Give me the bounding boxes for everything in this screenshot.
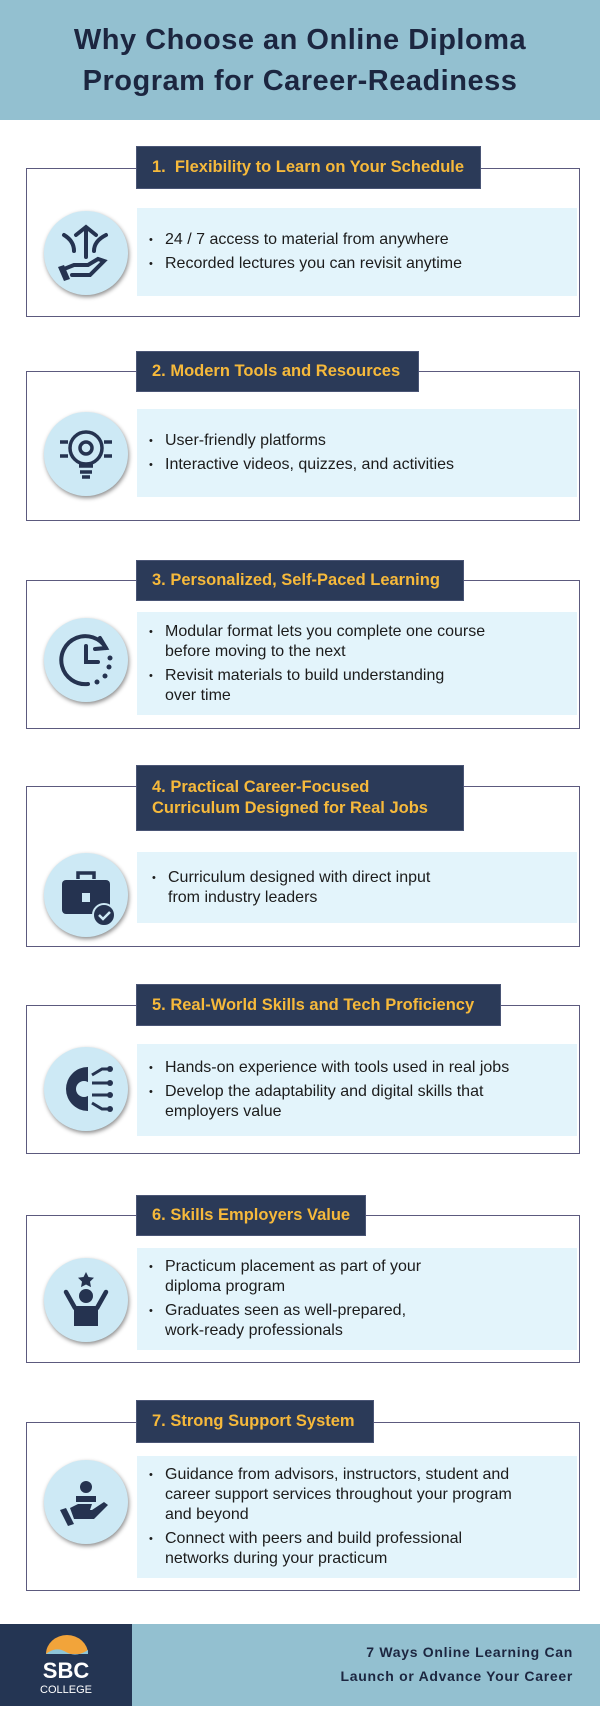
- panel 3 bullets: Modular format lets you complete one course: [165, 622, 485, 640]
- panel 7 bullets: [137, 1456, 577, 1578]
- panel 4 bullets: [137, 852, 577, 923]
- panel 5 bullets: [137, 1044, 577, 1136]
- panel 3 bullets: [137, 612, 577, 715]
- logo: SBC College: SBC: [43, 1658, 89, 1683]
- panel 4 bullets: Curriculum designed with direct input: [168, 868, 430, 886]
- panel 7 bullets: career support services throughout your program: [165, 1486, 512, 1503]
- panel 7 heading: [137, 1401, 373, 1442]
- icon: gear bulb: [44, 412, 128, 496]
- panel 6 heading: 6. Skills Employers Value: [152, 1206, 350, 1224]
- panel 1 heading: [137, 147, 480, 188]
- panel 7 bullets: and beyond: [165, 1506, 249, 1523]
- panel 6 bullets: Practicum placement as part of your: [165, 1258, 421, 1275]
- panel 6 bullets: diploma program: [165, 1278, 285, 1295]
- panel 5 bullets: employers value: [165, 1103, 282, 1120]
- panel 1 bullets: 24 / 7 access to material from anywhere: [165, 231, 449, 248]
- icon: hand with arrows: [44, 211, 128, 295]
- footer tagline: 7 Ways Online Learning Can: [366, 1644, 573, 1660]
- panel 5 heading: [137, 985, 500, 1025]
- panel 6 bullets: Graduates seen as well-prepared,: [165, 1302, 406, 1319]
- panel 1 heading: 1. Flexibility to Learn on Your Schedule: [152, 158, 464, 176]
- panel 2 bullets: Interactive videos, quizzes, and activities: [165, 456, 454, 473]
- panel 2 frame: [26, 371, 580, 521]
- footer tagline: [341, 1644, 573, 1684]
- panel 1 frame: [26, 168, 580, 317]
- panel 2 bullets: [137, 409, 577, 497]
- footer tagline: Launch or Advance Your Career: [341, 1668, 573, 1684]
- panel 1 bullets: [137, 208, 577, 296]
- panel 2 heading: 2. Modern Tools and Resources: [152, 362, 400, 380]
- panel 3 heading: 3. Personalized, Self-Paced Learning: [152, 571, 440, 589]
- panel 6 bullets: [137, 1248, 577, 1350]
- title: Program for Career-Readiness: [83, 65, 517, 97]
- panel 4 heading: [137, 766, 463, 830]
- panel 6 heading: [137, 1196, 365, 1235]
- panel 6 bullets: work-ready professionals: [165, 1322, 343, 1339]
- title: [74, 24, 526, 97]
- header band: [0, 0, 600, 120]
- logo: SBC College: [0, 1624, 132, 1706]
- panel 7 frame: [26, 1422, 580, 1591]
- panel 4 frame: [26, 786, 580, 947]
- icon: briefcase: [44, 853, 128, 937]
- panel 2 bullets: User-friendly platforms: [165, 432, 326, 449]
- icon: celebrating person: [44, 1258, 128, 1342]
- panel 5 bullets: Hands-on experience with tools used in real jobs: [165, 1059, 509, 1076]
- panel 3 bullets: over time: [165, 686, 231, 704]
- panel 3 bullets: Revisit materials to build understanding: [165, 666, 444, 684]
- panel 5 heading: 5. Real-World Skills and Tech Proficiency: [152, 996, 474, 1014]
- panel 4 heading: 4. Practical Career-Focused: [152, 778, 369, 796]
- panel 7 bullets: Connect with peers and build professional: [165, 1530, 462, 1547]
- icon: clock: [44, 618, 128, 702]
- icon: hand holding person: [44, 1460, 128, 1544]
- panel 4 heading: Curriculum Designed for Real Jobs: [152, 799, 428, 817]
- panel 5 frame: [26, 1005, 580, 1154]
- panel 5 bullets: Develop the adaptability and digital skills that: [165, 1083, 483, 1100]
- logo: SBC College: COLLEGE: [40, 1684, 92, 1696]
- panel 3 bullets: before moving to the next: [165, 642, 346, 660]
- panel 1 bullets: Recorded lectures you can revisit anytime: [165, 255, 462, 272]
- panel 7 bullets: networks during your practicum: [165, 1550, 387, 1567]
- panel 7 heading: 7. Strong Support System: [152, 1412, 355, 1430]
- title: Why Choose an Online Diploma: [74, 24, 526, 56]
- panel 6 frame: [26, 1215, 580, 1363]
- footer band: [0, 1624, 600, 1706]
- panel 3 heading: [137, 561, 463, 600]
- panel 4 bullets: from industry leaders: [168, 888, 317, 906]
- panel 2 heading: [137, 352, 418, 391]
- panel 3 frame: [26, 580, 580, 729]
- panel 7 bullets: Guidance from advisors, instructors, student and: [165, 1466, 509, 1483]
- icon: gear circuit: [44, 1047, 128, 1131]
